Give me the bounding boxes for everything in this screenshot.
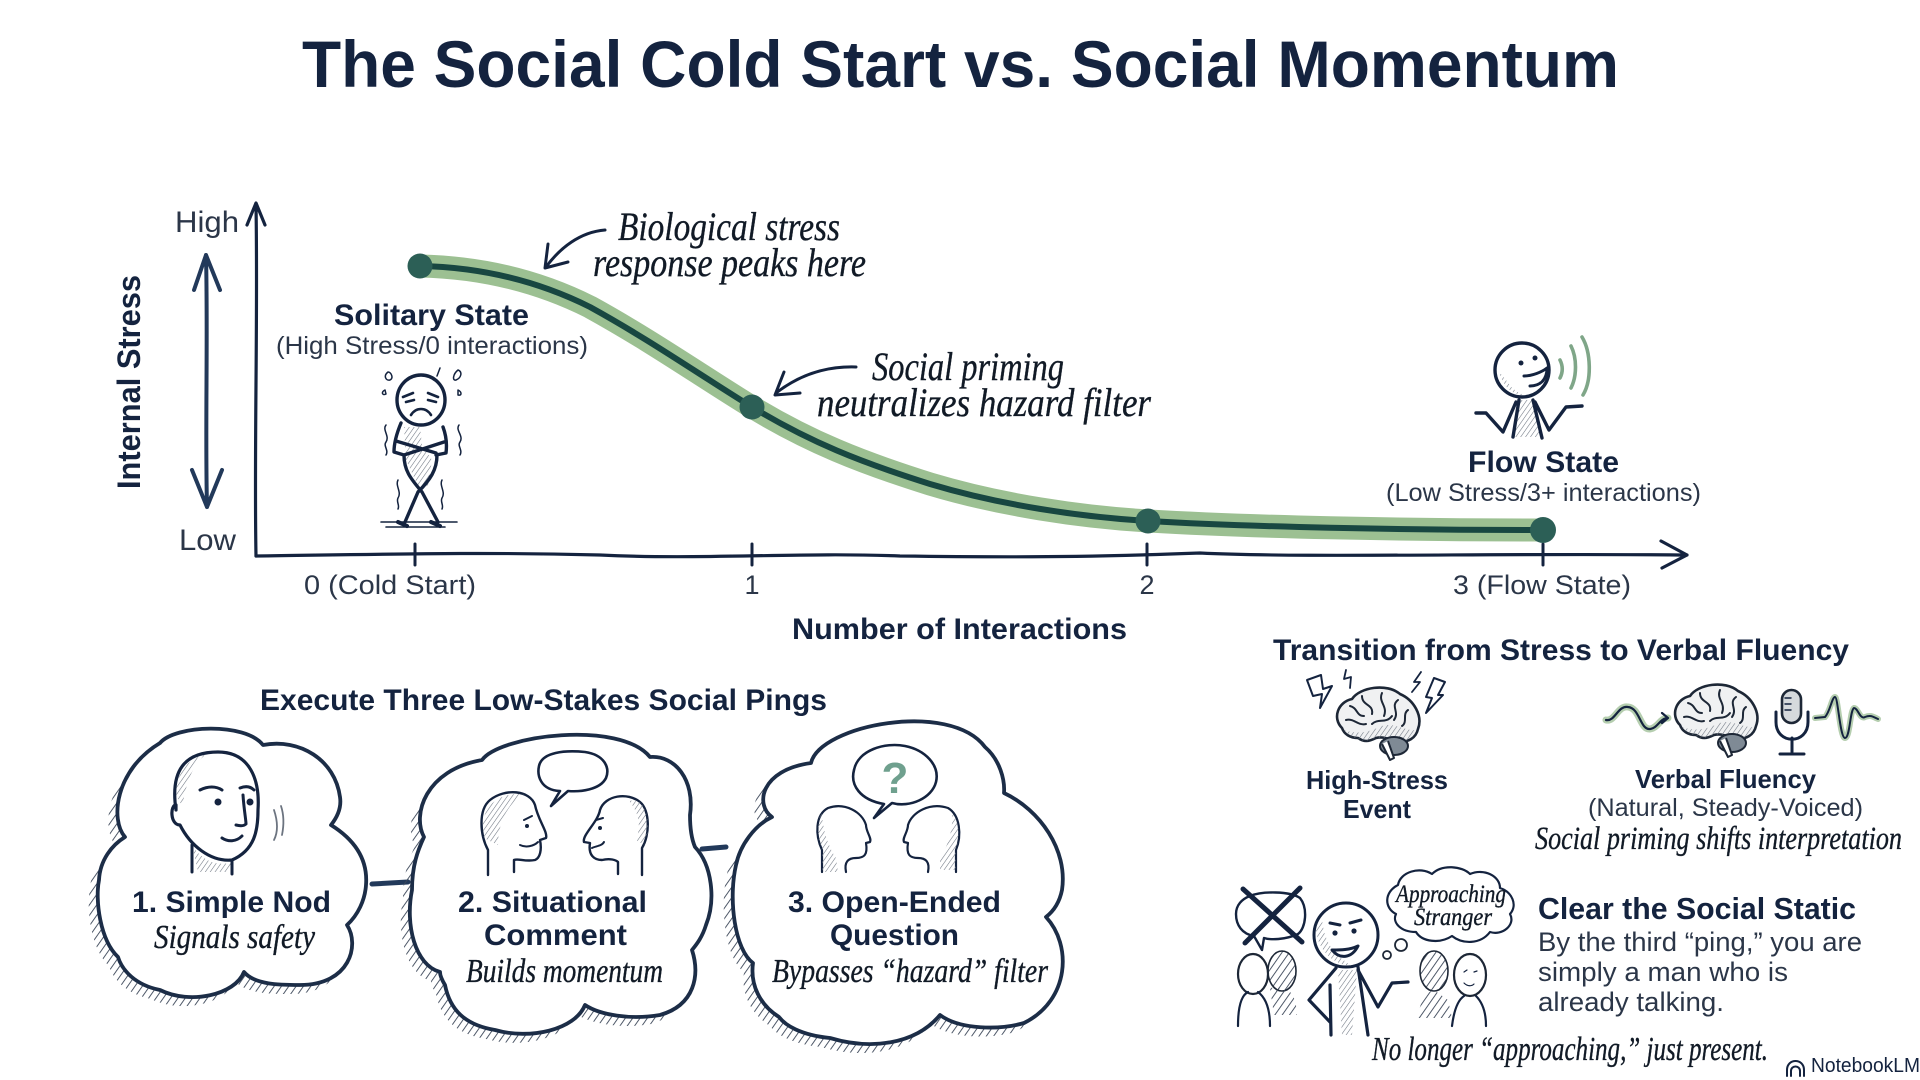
body text: clear the social static <box>1538 927 1862 1017</box>
icon: question bubble <box>853 745 937 818</box>
panel: situational comment <box>401 735 711 1043</box>
flow state label: (Low Stress/3+ interactions) <box>1386 479 1701 507</box>
icon: two listening heads <box>817 806 959 872</box>
note: just present: No longer “approaching,” just present. <box>1371 1031 1768 1068</box>
title: The Social Cold Start vs. Social Momentum <box>302 27 1619 101</box>
x tick label 2: 2 <box>1139 570 1155 600</box>
annotation: social priming <box>817 344 1151 425</box>
body text: clear the social static: simply a man who is <box>1538 957 1788 987</box>
annotation: social priming: neutralizes hazard filter <box>817 380 1151 425</box>
chart: stress vs interactions <box>111 203 1701 646</box>
x tick label 0: 0 (Cold Start) <box>304 570 476 600</box>
arrow: to social priming point <box>775 367 856 395</box>
ping 2 title <box>458 886 647 952</box>
icon: confident speaking figure <box>1476 337 1589 438</box>
label: high-stress event: High-Stress <box>1306 765 1448 795</box>
section heading: verbal fluency transition: Transition from Stress to Verbal Fluency <box>1273 634 1849 667</box>
panel: open-ended question <box>724 721 1063 1053</box>
section heading: clear the social static: Clear the Social Static <box>1538 891 1856 926</box>
ping 2 note: Builds momentum <box>466 953 663 990</box>
annotation: stress peak: response peaks here <box>593 240 866 285</box>
label: high-stress event: Event <box>1343 794 1411 824</box>
ping 3 note: Bypasses “hazard” filter <box>772 953 1049 990</box>
crossed-out speech bubble <box>1236 888 1305 950</box>
thought cloud: Stranger <box>1414 904 1492 931</box>
label: verbal fluency: Verbal Fluency <box>1635 764 1817 794</box>
icon: two people talking <box>482 792 648 875</box>
body text: clear the social static: already talking. <box>1538 987 1724 1017</box>
ping 2 title: 2. Situational <box>458 886 647 919</box>
body text: clear the social static: By the third “ping,” you are <box>1538 927 1862 957</box>
label: high-stress event <box>1306 765 1448 824</box>
y axis high label: High <box>175 206 239 239</box>
solitary state label: Solitary State <box>334 299 529 332</box>
x axis title: Number of Interactions <box>792 613 1127 646</box>
icon: stressed brain with lightning <box>1307 670 1445 760</box>
icon: speech bubble <box>538 751 607 806</box>
x tick label 3: 3 (Flow State) <box>1453 570 1631 600</box>
panel: simple nod <box>89 729 366 1006</box>
main smiling figure <box>1309 903 1408 1035</box>
left bystanders <box>1238 951 1297 1026</box>
ping 3 title: 3. Open-Ended <box>788 886 1001 919</box>
output wave <box>1815 697 1878 738</box>
ping 1 title: 1. Simple Nod <box>132 886 331 919</box>
thought cloud: Approaching <box>1394 881 1506 908</box>
x axis <box>256 541 1687 568</box>
microphone <box>1776 690 1808 754</box>
icon: question bubble: ? <box>882 754 908 803</box>
ping 2 title: Comment <box>484 919 627 952</box>
label: verbal fluency <box>1588 764 1863 822</box>
icon: nodding face <box>172 752 283 874</box>
connector: ping 1 to 2 <box>372 882 408 884</box>
double arrow: stress range <box>192 255 222 507</box>
thought cloud <box>1383 867 1514 959</box>
icon: calm brain with voice <box>1606 685 1878 757</box>
icon: notebooklm mark <box>1787 1061 1804 1076</box>
connector: ping 2 to 3 <box>702 847 726 849</box>
section heading: social pings: Execute Three Low-Stakes Social Pings <box>260 684 827 717</box>
ping 3 title: Question <box>830 919 959 952</box>
x tick label 1: 1 <box>744 570 760 600</box>
input wave <box>1606 707 1668 729</box>
flow state label <box>1386 446 1701 507</box>
annotation: stress peak <box>593 204 866 285</box>
right bystanders <box>1418 951 1486 1026</box>
solitary state label <box>276 299 588 360</box>
annotation: social priming: Social priming <box>872 344 1064 389</box>
y axis <box>247 203 265 556</box>
x axis ticks <box>415 544 1543 565</box>
ping 3 title <box>788 886 1001 952</box>
arrow: to stress peak <box>545 230 605 268</box>
annotation: stress peak: Biological stress <box>618 204 840 249</box>
y axis label: Internal Stress <box>111 275 147 489</box>
icon: stressed figure <box>381 368 461 527</box>
y axis low label: Low <box>179 524 236 557</box>
ping 1 note: Signals safety <box>154 919 316 956</box>
illustration: clearing social static <box>1236 867 1514 1035</box>
flow state label: Flow State <box>1468 446 1619 479</box>
stress curve <box>408 254 1556 543</box>
label: verbal fluency: (Natural, Steady-Voiced) <box>1588 794 1863 822</box>
solitary state label: (High Stress/0 interactions) <box>276 332 588 360</box>
